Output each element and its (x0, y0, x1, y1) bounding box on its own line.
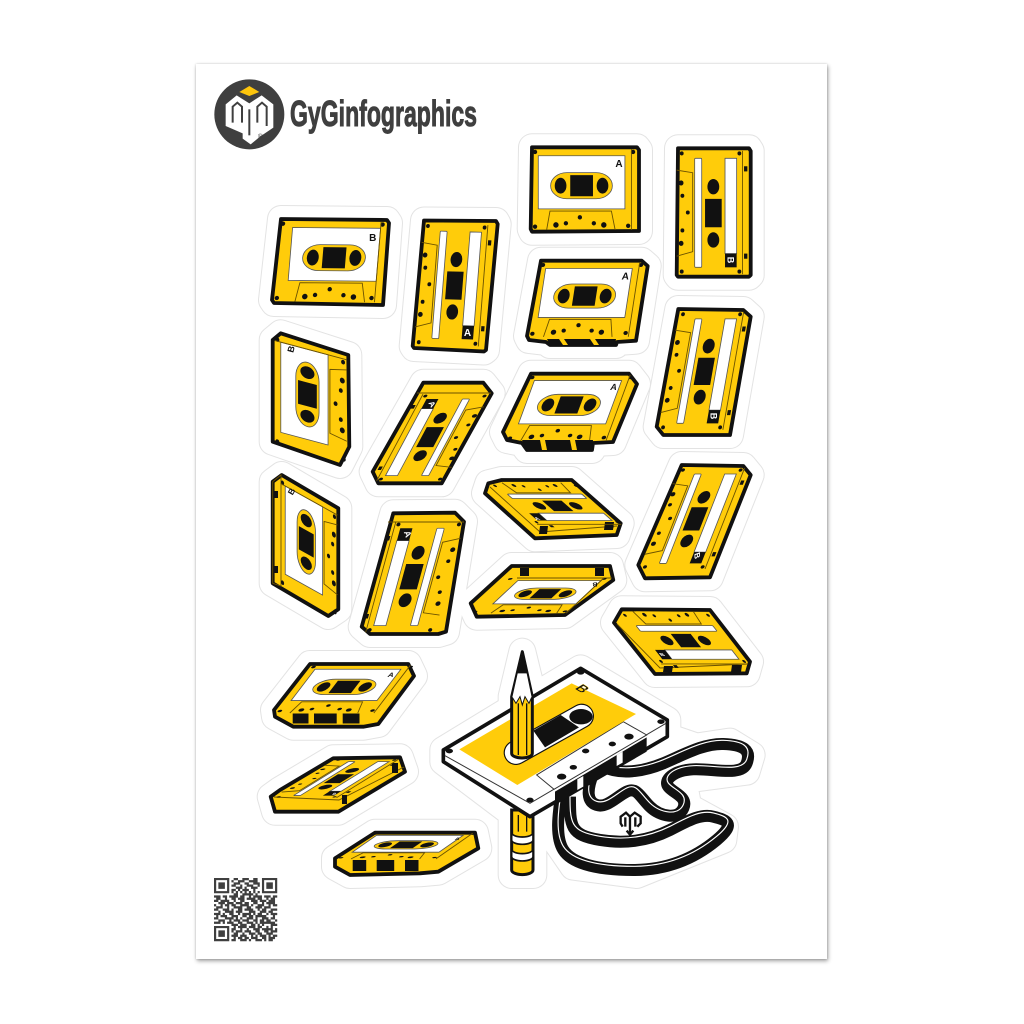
cassette sticker: A side, top centre (531, 147, 639, 232)
cassette sticker: B side, top left: B (369, 233, 376, 244)
wordmark: GyGinfographics (290, 93, 477, 134)
cassette sticker: A side, stronger tilt (503, 374, 637, 450)
cassette sticker: strip face A, upside down tilted: A (427, 399, 437, 409)
cassette sticker: B side, rotated left, with side band (273, 475, 338, 616)
magnetic tape loops (558, 740, 748, 870)
cassette sticker: B side, flat, upside down letter (471, 566, 613, 617)
cassette sticker: strip face B, right column (657, 309, 751, 435)
icon: logo badge: ® (258, 133, 263, 141)
pencil upper section (512, 652, 532, 758)
icon: small GyG mark (621, 813, 641, 835)
icon: logo badge (214, 79, 284, 149)
pencil lower section (512, 810, 533, 875)
cassette sticker: A side, top centre: A (615, 159, 623, 170)
cassette sticker: strip face B, right tilted (638, 465, 751, 578)
logo: GyG badge and wordmark (214, 79, 477, 149)
cassette sticker: strip face A, upside down steep (361, 513, 465, 634)
cassette sticker: B side, rotated left (273, 333, 349, 465)
cassette sticker: A side, slight tilt: A (621, 272, 630, 282)
cassette sticker: strip face A, upside down tilted (372, 383, 492, 483)
cassette sticker: strip face B, right column: B (708, 413, 718, 420)
cassette sticker: B side, flat, upside down letter: B (592, 581, 598, 587)
cassette body: B (572, 682, 593, 695)
cassette sticker: strip face B, right tilted: B (693, 551, 701, 560)
cassette sticker: strip face A, lying flat (485, 480, 625, 538)
cassette sticker: A side, isometric with tape slots (274, 664, 414, 727)
cassette sticker: strip face B, lying flat right (614, 609, 751, 674)
cassette sticker: A side, stronger tilt: A (609, 382, 619, 392)
cassette body (443, 668, 667, 817)
cassette sticker: A side, slight tilt (527, 261, 648, 345)
cassette sticker: A side, isometric with tape slots: A (386, 671, 396, 679)
cassette sticker: strip face B, low angle (271, 757, 405, 812)
cassette sticker: strip face B, top right (677, 148, 751, 277)
QR code (214, 878, 277, 941)
cassette sticker: B side, rotated left, with side band: B (286, 486, 297, 497)
cassette sticker: B side, rotated left: B (285, 344, 297, 354)
cassette sticker: strip face A, second column (413, 220, 498, 352)
cassette sticker: strip face B, low angle: B (331, 792, 338, 796)
cassette sticker: strip face A, upside down steep: A (402, 529, 414, 539)
sticker backings (271, 147, 752, 875)
illustration: large cassette with pencil and tape (443, 652, 748, 875)
cassette sticker: A side, shallow view: A (454, 837, 461, 841)
cassette sticker: strip face B, top right: B (726, 257, 736, 264)
cassette sticker: strip face A, lying flat: A (534, 517, 543, 521)
cassette sticker: strip face B, lying flat right: B (659, 653, 668, 657)
cassette sticker: A side, shallow view (335, 833, 478, 875)
cassette sticker: B side, top left (272, 219, 389, 305)
cassette sticker: strip face A, second column: A (464, 328, 471, 339)
sticker sheet (196, 64, 827, 959)
